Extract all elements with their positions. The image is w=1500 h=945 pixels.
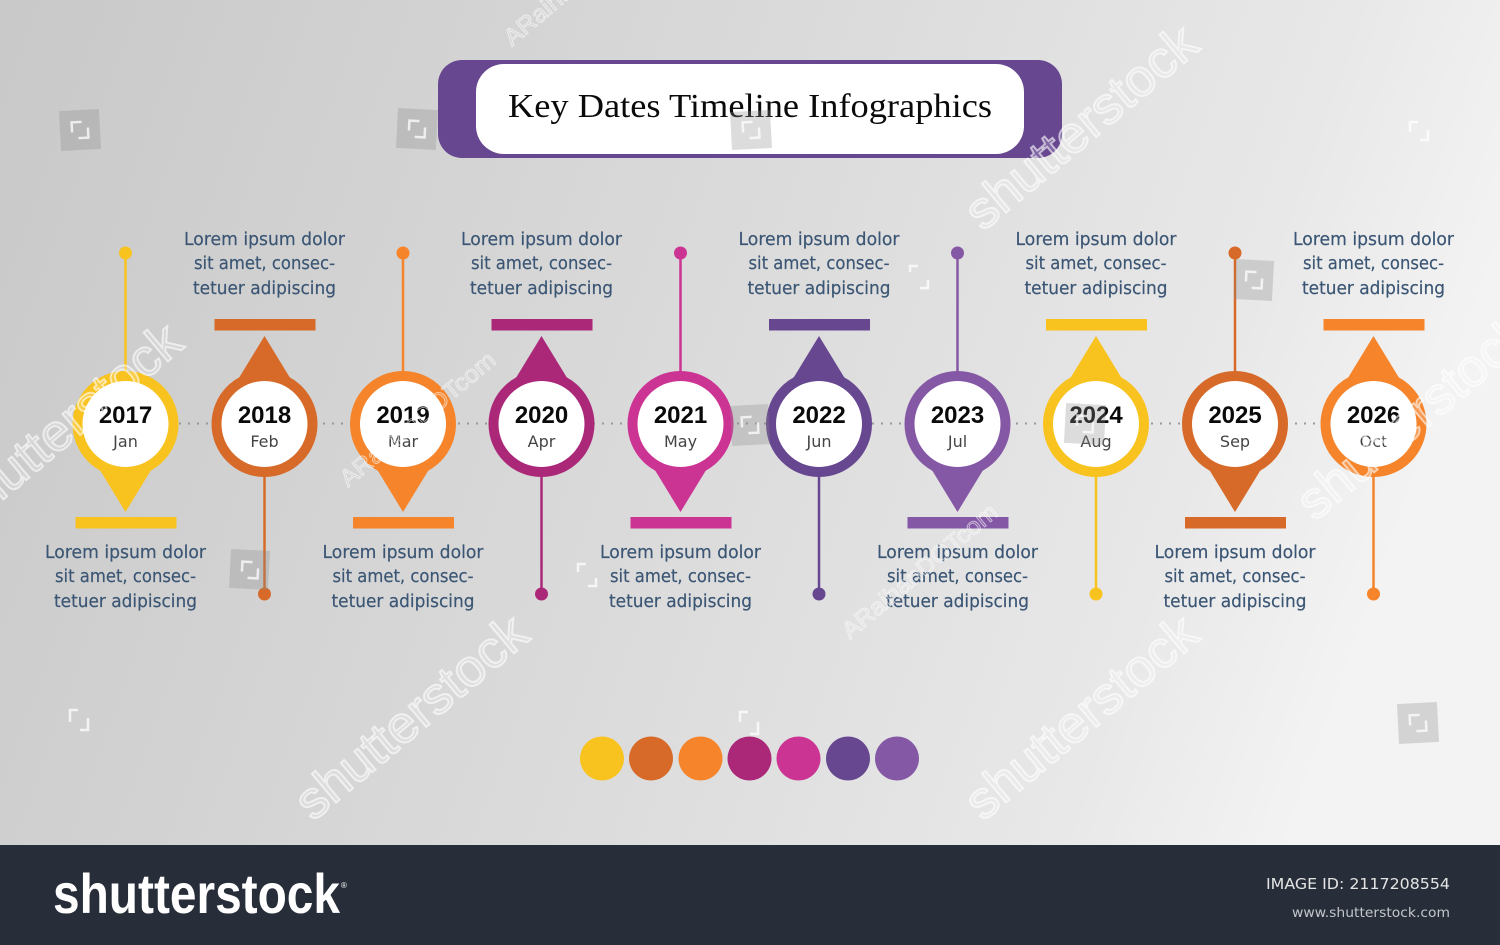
title banner [438,60,1062,158]
colour palette dots [580,736,919,780]
watermark text: shutterstock [283,603,540,831]
milestone 2026: tetuer adipiscing [1302,279,1445,299]
watermark text: ARaihanDOTcom [837,499,1003,645]
milestone 2026: sit amet, consec- [1303,254,1444,274]
milestone 2017: Lorem ipsum dolor [45,543,207,563]
milestone 2025: 2025 [1208,402,1262,429]
milestone 2024: tetuer adipiscing [1024,279,1168,299]
milestone 2021: May [664,432,697,451]
milestone 2021: Lorem ipsum dolor [600,543,762,563]
milestone 2020 [461,230,623,600]
milestone 2018: Feb [250,432,279,451]
milestone 2026: Lorem ipsum dolor [1293,230,1455,250]
milestone 2026: Oct [1360,432,1387,451]
watermark squares [59,108,1439,744]
milestone 2023: 2023 [931,402,984,429]
milestone 2020: 2020 [515,402,568,429]
image id: IMAGE ID: 2117208554 [1266,875,1450,893]
milestone 2024: 2024 [1069,402,1123,429]
milestone 2020: tetuer adipiscing [470,279,613,299]
milestone 2019 [322,246,484,612]
milestone 2019: Lorem ipsum dolor [322,543,484,563]
milestone 2024: sit amet, consec- [1026,254,1166,274]
milestone 2023 [877,246,1039,612]
milestone 2024: Lorem ipsum dolor [1016,230,1177,250]
watermark text: ARaihanDOTcom [335,347,501,493]
milestone 2021: tetuer adipiscing [609,592,752,612]
milestone 2024: Aug [1080,432,1112,451]
milestone 2017 [45,246,207,612]
milestone 2026: 2026 [1347,402,1400,429]
milestone 2018 [184,230,346,600]
milestone 2018: Lorem ipsum dolor [184,230,346,250]
milestone 2022: Lorem ipsum dolor [738,230,900,250]
milestone 2025 [1154,246,1316,612]
registered mark: ® [341,881,347,890]
milestone 2017: sit amet, consec- [55,567,196,587]
milestone 2017: Jan [112,432,138,451]
milestone 2018: tetuer adipiscing [193,279,336,299]
milestone 2019: Mar [388,432,419,451]
milestone 2019: tetuer adipiscing [332,592,474,612]
milestone 2019: 2019 [376,402,430,429]
milestone 2020: Apr [528,432,556,451]
milestone 2021: sit amet, consec- [610,567,751,587]
watermark text: shutterstock [953,13,1210,241]
milestone 2022: sit amet, consec- [748,254,890,274]
milestone 2025: Sep [1220,432,1250,451]
dotted timeline axis [179,422,1320,424]
milestone 2025: Lorem ipsum dolor [1154,543,1316,563]
milestone 2022 [738,230,900,600]
milestone 2026 [1293,230,1455,600]
milestone 2023: Lorem ipsum dolor [877,543,1039,563]
footer logo: shutterstock [53,862,341,925]
milestone 2023: sit amet, consec- [887,567,1028,587]
milestone 2021 [600,246,762,612]
milestone 2022: 2022 [792,402,846,429]
milestone 2025: sit amet, consec- [1164,567,1306,587]
milestone 2022: tetuer adipiscing [748,279,890,299]
milestone 2021: 2021 [654,402,707,429]
milestone 2018: sit amet, consec- [194,254,335,274]
milestone 2019: sit amet, consec- [332,567,474,587]
milestone 2023: tetuer adipiscing [886,592,1029,612]
milestone 2025: tetuer adipiscing [1164,592,1306,612]
milestone 2023: Jul [947,432,967,451]
milestone 2017: 2017 [99,402,152,429]
footer bar [0,845,1500,945]
milestone 2020: sit amet, consec- [471,254,612,274]
milestone 2020: Lorem ipsum dolor [461,230,623,250]
website: www.shutterstock.com [1292,905,1450,921]
watermark text: shutterstock [953,603,1210,831]
milestone 2017: tetuer adipiscing [54,592,197,612]
milestone 2018: 2018 [238,402,291,429]
title: Key Dates Timeline Infographics [508,88,992,125]
milestone 2024 [1016,230,1177,600]
milestone 2022: Jun [806,432,832,451]
